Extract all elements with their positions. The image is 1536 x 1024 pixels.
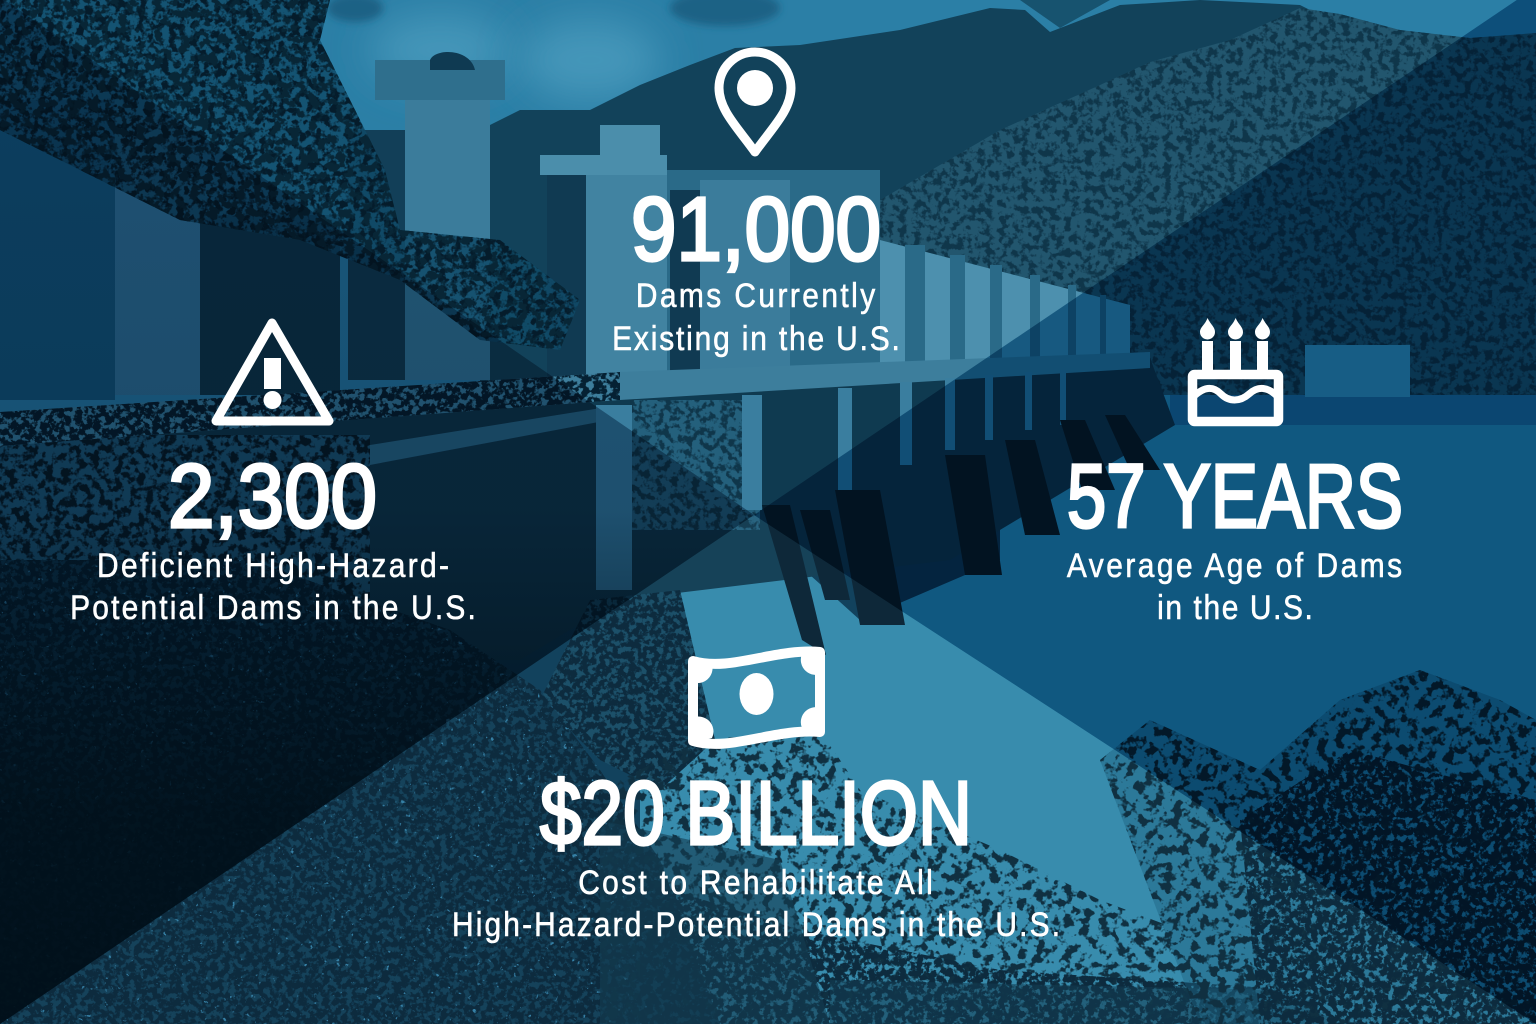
tower one: [405, 90, 490, 380]
label: Average Age of Dams: [1067, 546, 1402, 584]
overlay: left dark triangle: [0, 0, 754, 1024]
rocks beside foam: [540, 590, 715, 790]
dam deck: [0, 352, 1150, 446]
number: 2,300: [168, 447, 377, 547]
overlay: right triangle: [754, 0, 1536, 1024]
dark block behind towers: [190, 215, 340, 395]
number: 57 YEARS: [1067, 447, 1403, 547]
icon: birthday cake: [1192, 318, 1279, 422]
stat: 2,300 deficient dams: [70, 323, 476, 626]
tower three: [700, 180, 790, 375]
back mountain: [480, 0, 1350, 420]
front mountain: [700, 8, 1536, 430]
stat: $20 billion: [452, 650, 1060, 943]
stat: $20 billion: High-Hazard-Potential Dams in the U.S.: [452, 905, 1060, 943]
river water and foam: [1000, 395, 1536, 1024]
number: 91,000: [631, 180, 881, 280]
stat: 91,000 dams: [612, 52, 900, 357]
piers: [596, 370, 1066, 590]
dam gates, far end: [660, 170, 880, 375]
left column: [115, 120, 200, 395]
number: $20 BILLION: [540, 764, 972, 864]
power house: [1305, 345, 1410, 397]
icon: dollar bill: [690, 650, 823, 744]
icon: map pin: [719, 52, 791, 152]
stat: 91,000 dams: Existing in the U.S.: [612, 319, 900, 357]
stat: 57 years: in the U.S.: [1157, 588, 1313, 626]
overlay: bottom triangle: [0, 515, 1536, 1024]
sky: [0, 0, 1536, 420]
tree, upper left: [0, 0, 580, 350]
label: Deficient High-Hazard-: [97, 546, 449, 584]
foliage: bottom centre: [600, 730, 1330, 1024]
spillway dark sluices: [762, 415, 1160, 655]
icon: warning triangle: [216, 323, 329, 421]
label: Cost to Rehabilitate All: [578, 863, 933, 901]
stat: 2,300 deficient dams: Potential Dams in the U.S.: [70, 588, 476, 626]
tower two: [586, 155, 667, 380]
label: Dams Currently: [636, 276, 875, 314]
foliage: right bush: [1100, 670, 1536, 1024]
foliage: left mass: [0, 560, 720, 1024]
stat: 57 years: [1067, 318, 1403, 626]
dam wall: [0, 358, 1175, 660]
